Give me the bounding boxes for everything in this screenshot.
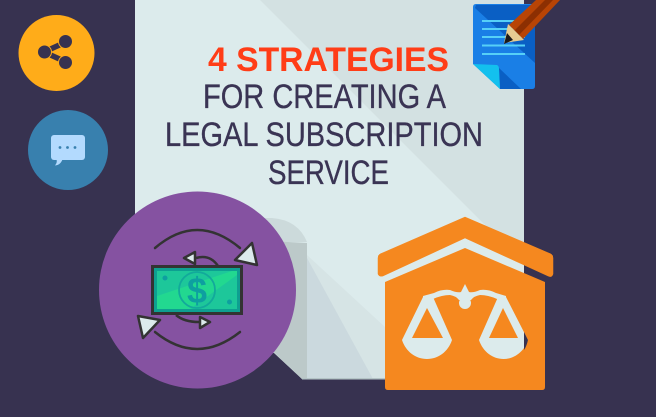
pencil — [509, 0, 560, 39]
house body — [385, 248, 545, 390]
icon: share button — [18, 15, 94, 91]
left pan — [402, 297, 452, 359]
icon: money cycle circle — [99, 192, 296, 388]
title line: service: SERVICE — [268, 154, 389, 192]
outer cycle arrows — [155, 230, 240, 248]
icon: chat button — [28, 110, 108, 190]
right pan — [479, 297, 528, 359]
title line: 4 strategies: 4 STRATEGIES — [208, 41, 449, 79]
icon: law house — [378, 217, 553, 390]
roof — [378, 217, 553, 277]
title line: for creating a: FOR CREATING A — [203, 78, 446, 116]
icon: document with pencil — [473, 0, 560, 89]
title line: legal subscription: LEGAL SUBSCRIPTION — [165, 116, 483, 154]
banknote — [152, 266, 242, 314]
scales of justice — [402, 284, 528, 359]
panel: paper sheet — [135, 0, 524, 380]
document page — [473, 4, 535, 89]
inner cycle arrows — [196, 257, 218, 266]
background showing through right pan — [524, 332, 528, 350]
title — [165, 41, 483, 192]
dollar sign: $ — [187, 270, 207, 311]
